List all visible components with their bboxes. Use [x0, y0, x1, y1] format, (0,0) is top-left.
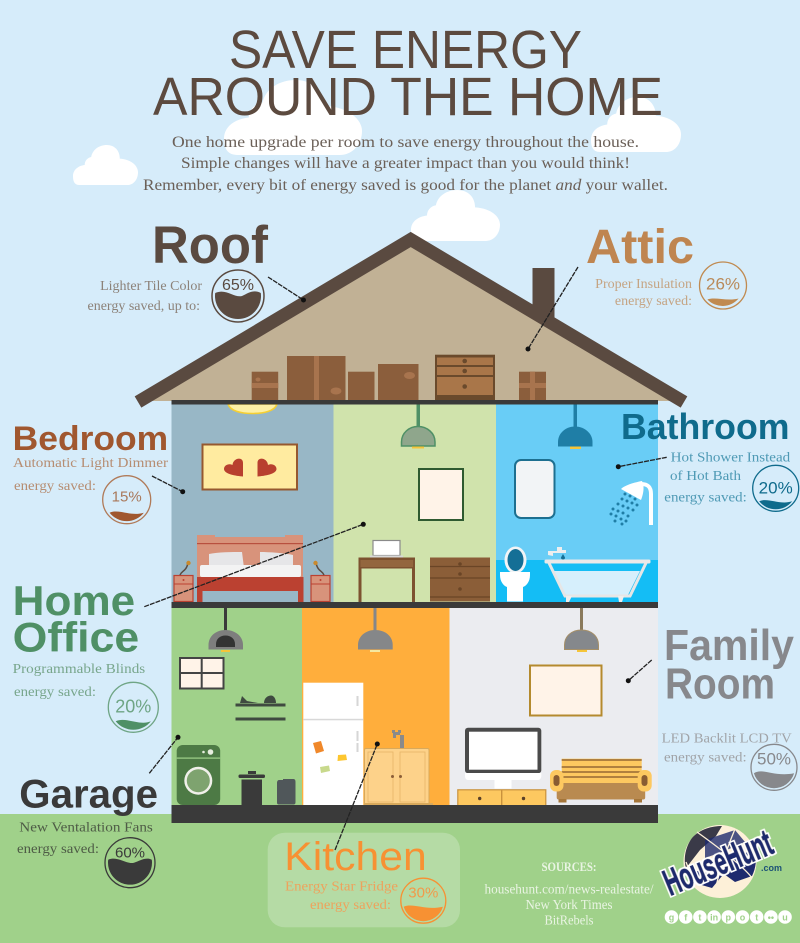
sofa [550, 759, 652, 802]
fridge [303, 683, 363, 805]
heart picture [202, 444, 297, 490]
label: garage: energy saved: [17, 842, 99, 857]
intro text: Simple changes will have a greater impact than you would think! [181, 155, 630, 172]
label: roof: energy saved, up to: [88, 299, 200, 314]
family room picture [530, 666, 602, 716]
gauge: attic [700, 262, 746, 309]
gauge: kitchen: 30% [408, 885, 438, 902]
gauge: home office: 20% [115, 696, 151, 716]
bedroom light [228, 404, 277, 414]
intro text: Remember, every bit of energy saved is good for the planet and your wallet. [143, 177, 668, 194]
sources: househunt.com/news-realestate/ [484, 882, 654, 896]
chimney [532, 268, 554, 323]
label: family room: energy saved: [664, 750, 747, 766]
social icons: t [698, 912, 701, 922]
washing machine [177, 745, 220, 805]
roof [138, 240, 684, 402]
attic storage [252, 355, 546, 401]
label: bathroom: of Hot Bath [670, 469, 741, 484]
intro text [143, 134, 668, 194]
gas can [277, 779, 296, 804]
kitchen lamp [358, 608, 393, 652]
room: family room [450, 608, 658, 806]
gauge: roof: 65% [222, 277, 254, 294]
label: garage: New Ventalation Fans [19, 820, 153, 836]
sources: SOURCES: [542, 860, 596, 874]
toilet [500, 546, 530, 602]
sources: BitRebels [544, 912, 594, 928]
office picture [419, 469, 463, 520]
callout lines [144, 267, 667, 850]
room: kitchen [302, 608, 450, 806]
label: roof: Roof [152, 216, 268, 275]
shower [610, 481, 651, 526]
garage shelves [236, 696, 286, 720]
title [153, 20, 663, 127]
gauge: bedroom: 15% [112, 489, 142, 506]
label: garage [17, 772, 158, 888]
label: home office: Programmable Blinds [13, 662, 145, 677]
label: bedroom: energy saved: [14, 479, 96, 494]
tv console [458, 790, 546, 806]
social icons [665, 910, 792, 924]
label: garage: Garage [19, 772, 158, 816]
label: attic: Attic [586, 221, 694, 274]
social icons: •• [768, 912, 774, 922]
label: home office: Home [13, 577, 135, 624]
label: kitchen: Kitchen [284, 835, 427, 879]
attic wall [148, 246, 672, 401]
gauge: family room: 50% [757, 749, 791, 768]
gauge: bathroom: 20% [759, 478, 793, 497]
title: SAVE ENERGY [229, 20, 582, 80]
house [138, 240, 684, 823]
social icons: p [726, 912, 732, 922]
gauge: attic: 26% [706, 274, 740, 294]
label: kitchen: energy saved: [310, 898, 391, 913]
label: bedroom: Bedroom [13, 420, 168, 458]
label: bathroom: Bathroom [621, 406, 790, 447]
gauge: garage [105, 838, 155, 888]
label: bathroom [621, 406, 799, 511]
label: family room: Room [665, 660, 775, 708]
dresser [430, 558, 490, 602]
gauge: garage: 60% [115, 845, 145, 862]
room: home office [334, 404, 496, 602]
label: home office: energy saved: [14, 685, 96, 700]
globe [684, 825, 756, 898]
room: bathroom [496, 404, 658, 602]
sources [484, 860, 654, 928]
social icons: in [710, 912, 718, 922]
label: bathroom: Hot Shower Instead [671, 450, 790, 466]
label: home office [13, 577, 158, 732]
label: kitchen [268, 833, 460, 927]
ceiling [172, 400, 658, 404]
gauge: kitchen [401, 878, 446, 923]
gauge: bathroom [753, 465, 799, 511]
upper floor slab [172, 602, 658, 608]
label: attic: Proper Insulation [595, 277, 692, 292]
office lamp [402, 404, 435, 448]
label: bathroom: energy saved: [664, 490, 747, 506]
gauge: roof [212, 270, 264, 322]
label: bedroom: Automatic Light Dimmer [13, 456, 168, 471]
garage window [180, 658, 224, 688]
clouds [73, 80, 681, 241]
gauge: home office [108, 682, 158, 732]
label: kitchen: Energy Star Fridge [285, 880, 398, 895]
label: family room: Family [664, 621, 794, 670]
social icons: t [755, 912, 758, 922]
label: bedroom [13, 420, 168, 524]
desk and laptop [358, 540, 415, 602]
nightstands [174, 561, 330, 602]
label: roof [88, 216, 268, 322]
gauge: family room [751, 744, 797, 790]
social icons: u [782, 912, 788, 922]
bathroom lamp [558, 404, 592, 449]
garage lamp [208, 608, 243, 652]
logo: househunt [657, 822, 792, 924]
social icons: g [669, 912, 674, 922]
kitchen cabinet and faucet [364, 730, 433, 806]
family room lamp [564, 608, 598, 652]
trash can [238, 771, 265, 806]
dot com: .com [761, 863, 782, 873]
social icons: o [740, 912, 746, 922]
bathtub [544, 547, 650, 602]
sources: New York Times [526, 897, 612, 912]
foundation [172, 805, 658, 823]
television [465, 728, 541, 788]
title: AROUND THE HOME [153, 67, 663, 127]
room: garage [172, 608, 302, 806]
social icons: f [684, 912, 688, 922]
room: bedroom [172, 404, 334, 602]
label: family room: LED Backlit LCD TV [662, 732, 792, 746]
label: attic [586, 221, 746, 309]
intro text: One home upgrade per room to save energy throughout the house. [172, 134, 639, 151]
label: family room [662, 621, 797, 790]
gauge: bedroom [103, 476, 151, 524]
bed [197, 535, 304, 602]
label: home office: Office [13, 614, 139, 660]
mirror [515, 460, 554, 518]
label: attic: energy saved: [615, 294, 692, 309]
ground [0, 814, 800, 943]
label: roof: Lighter Tile Color [100, 279, 202, 294]
